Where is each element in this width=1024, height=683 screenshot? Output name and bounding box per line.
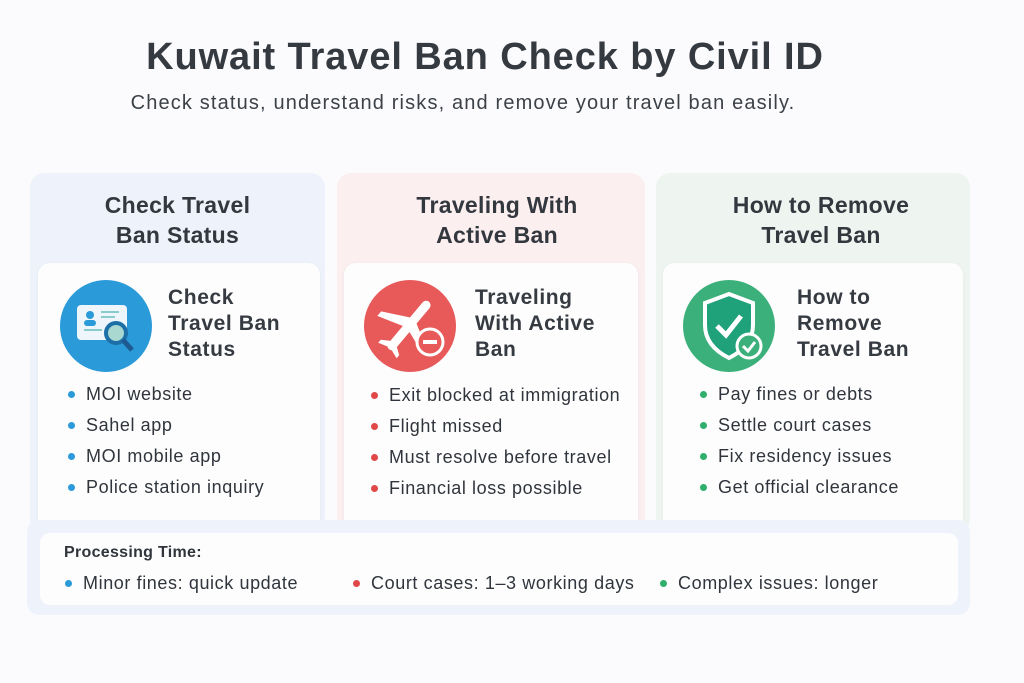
list: Exit blocked at immigration [389,385,620,405]
list: Settle court cases [718,415,872,435]
list [371,385,620,498]
list: Flight missed [389,416,503,436]
card title: Check [168,286,234,309]
card title: Ban [475,338,516,361]
card: check [38,263,320,533]
list: Financial loss possible [389,478,583,498]
card title: With Active [475,312,595,335]
icon: plane blocked [364,280,456,372]
heading: active [416,192,578,248]
list: Police station inquiry [86,477,264,497]
heading: remove: How to Remove [733,192,909,218]
list: Fix residency issues [718,446,892,466]
inner card: Court cases: 1–3 working days [371,573,635,593]
panel: processing time [27,520,970,615]
list: Get official clearance [718,477,899,497]
heading: check: Ban Status [116,222,239,248]
inner card [40,533,958,605]
heading: remove: Travel Ban [761,222,881,248]
heading: Processing Time: [64,544,202,561]
card title: Traveling [475,286,573,309]
card title: Travel Ban [797,338,909,361]
heading: check [105,192,250,248]
items: Minor fines: quick update [83,573,298,593]
heading: check: Check Travel [105,192,250,218]
heading: active: Active Ban [436,222,558,248]
icon: id card magnifier [60,280,152,372]
card title [475,286,595,361]
card title: Travel Ban [168,312,280,335]
card: remove [663,263,963,533]
card title: Remove [797,312,882,335]
card title: Status [168,338,236,361]
list: Pay fines or debts [718,384,873,404]
list [68,384,264,497]
list: MOI mobile app [86,446,221,466]
heading: active: Traveling With [416,192,578,218]
card title [797,286,909,361]
card: active [344,263,638,533]
panel: check status [30,173,325,533]
heading: remove [733,192,909,248]
panel: remove [656,173,970,533]
list: MOI website [86,384,193,404]
list [700,384,899,497]
list: Sahel app [86,415,172,435]
card title [168,286,280,361]
subtitle: Check status, understand risks, and remove your travel ban easily. [131,92,795,114]
card title: How to [797,286,871,309]
title: Kuwait Travel Ban Check by Civil ID [146,36,824,78]
list: Must resolve before travel [389,447,612,467]
icon: shield check [683,280,775,372]
panel: active ban [337,173,645,533]
inner card: Complex issues: longer [678,573,878,593]
